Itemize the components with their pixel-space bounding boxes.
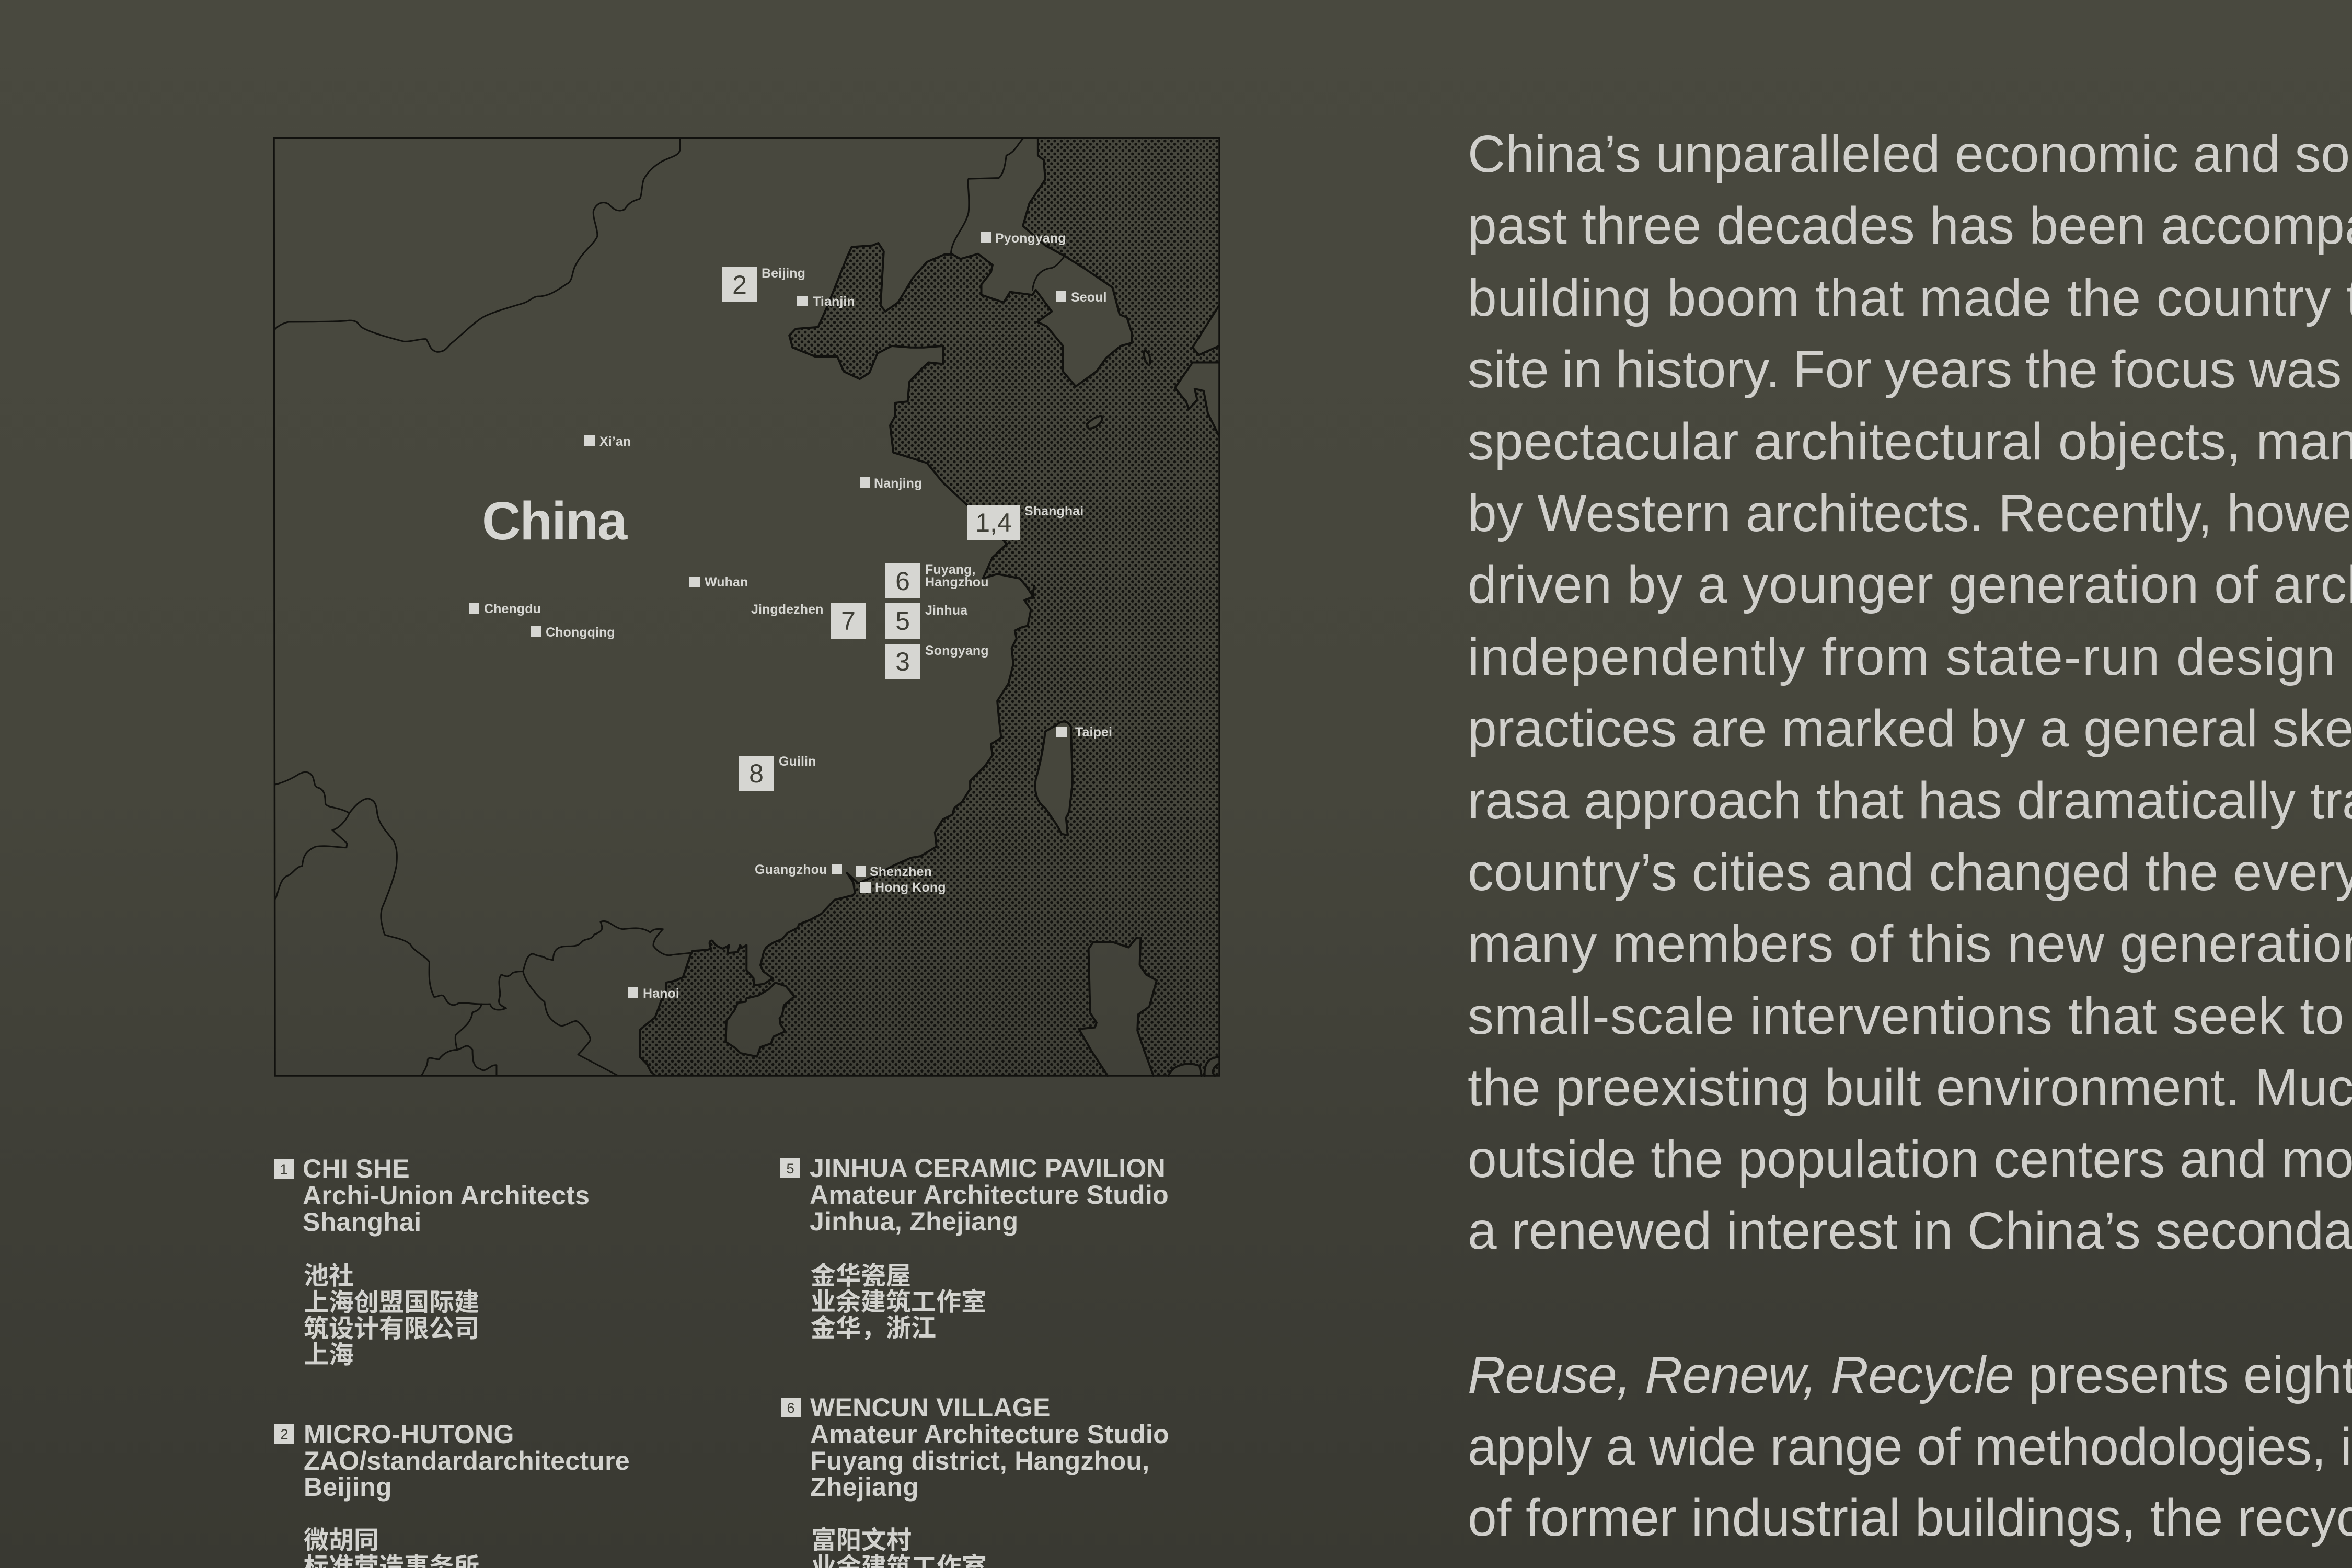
city: Nanjing: Nanjing (874, 476, 922, 491)
legend entry 2: Micro-Hutong: 2 (280, 1426, 289, 1442)
city: Pyongyang: Pyongyang (995, 231, 1066, 246)
legend entry 1: Chi She: 1 (280, 1161, 288, 1177)
marker 6: Fuyang, Hangzhou: Fuyang, (925, 562, 976, 577)
legend entry 1: Chi She: 池社 (304, 1262, 354, 1290)
marker 3: Songyang: 3 (895, 647, 910, 676)
legend entry 5: Jinhua Ceramic Pavilion: 金华瓷屋 (811, 1262, 911, 1290)
legend entry 6: Wencun Village: Amateur Architecture Studio (810, 1420, 1169, 1449)
legend entry 1: Chi She: 筑设计有限公司 (304, 1315, 479, 1343)
city: Hong Kong: Hong Kong (875, 880, 946, 895)
legend entry 6: Wencun Village: 富阳文村 (811, 1527, 912, 1554)
body text: introduction paragraph: small-scale interventions that seek to (1468, 987, 2345, 1045)
city: Wuhan: Wuhan (705, 575, 748, 590)
legend entry 5: Jinhua Ceramic Pavilion (780, 1154, 1169, 1342)
legend entry 1: Chi She (274, 1154, 590, 1369)
body text: second paragraph (1468, 1346, 2352, 1547)
legend entry 2: Micro-Hutong (274, 1420, 630, 1568)
legend entry 1: Chi She: 上海创盟国际建 (304, 1289, 479, 1317)
legend entry 5: Jinhua Ceramic Pavilion: JINHUA CERAMIC PAVILION (810, 1154, 1166, 1183)
marker 6: Fuyang, Hangzhou (885, 562, 989, 598)
legend entry 2: Micro-Hutong: MICRO-HUTONG (304, 1420, 514, 1449)
city: Chongqing: Chongqing (546, 625, 615, 640)
marker 2: Beijing: 2 (732, 270, 747, 299)
marker 8: Guilin: Guilin (779, 754, 816, 769)
marker 5: Jinhua: Jinhua (925, 603, 968, 618)
legend entry 6: Wencun Village: 6 (787, 1400, 795, 1416)
legend entry 1: Chi She: 上海 (304, 1341, 354, 1369)
marker 7: Jingdezhen: 7 (841, 606, 856, 636)
coastline: East China Sea, Taiwan, Philippines (847, 586, 1218, 1076)
coastline: Yellow Sea, Korea, Japan (789, 139, 1219, 598)
legend entry 5: Jinhua Ceramic Pavilion: Amateur Architecture Studio (810, 1180, 1169, 1209)
legend entry 5: Jinhua Ceramic Pavilion: 金华，浙江 (811, 1315, 936, 1342)
city: Taipei: Taipei (1075, 725, 1112, 740)
city: Hanoi: Hanoi (643, 986, 679, 1001)
marker 3: Songyang: Songyang (925, 643, 989, 658)
country label: China: China (482, 491, 628, 551)
legend entry 1: Chi She: Shanghai (303, 1207, 421, 1237)
legend entry 6: Wencun Village: Zhejiang (810, 1472, 919, 1502)
body text: introduction paragraph (1468, 125, 2352, 1260)
marker 1,4: Shanghai: 1,4 (975, 508, 1012, 537)
city: Chengdu: Chengdu (484, 602, 541, 616)
marker 3: Songyang (885, 643, 989, 679)
map frame (274, 138, 1219, 1076)
marker 1,4: Shanghai (967, 504, 1083, 540)
legend entry 5: Jinhua Ceramic Pavilion: Jinhua, Zhejiang (810, 1207, 1018, 1236)
body text: second paragraph: Reuse, Renew, Recycle presents eight (1468, 1346, 2352, 1404)
legend entry 6: Wencun Village: WENCUN VILLAGE (810, 1393, 1051, 1422)
legend entry 5: Jinhua Ceramic Pavilion: 业余建筑工作室 (811, 1288, 986, 1316)
land borders north (275, 139, 680, 352)
legend entry 5: Jinhua Ceramic Pavilion: 5 (786, 1161, 794, 1177)
city: Xi'an (584, 434, 631, 449)
city: Xi'an: Xi’an (599, 434, 631, 449)
legend entry 6: Wencun Village: Fuyang district, Hangzhou, (810, 1446, 1149, 1475)
map panel: China (274, 138, 1219, 1076)
marker 2: Beijing: Beijing (762, 266, 805, 281)
marker 6: Fuyang, Hangzhou: 6 (895, 567, 910, 596)
city: Taipei (1056, 725, 1112, 740)
marker 5: Jinhua: 5 (895, 606, 910, 636)
legend entry 6: Wencun Village (781, 1393, 1169, 1568)
body text: introduction paragraph: many members of this new generation (1468, 915, 2352, 973)
city: Seoul: Seoul (1071, 290, 1107, 305)
city: Tianjin: Tianjin (813, 294, 855, 309)
marker 2: Beijing (722, 266, 805, 302)
marker 7: Jingdezhen: Jingdezhen (751, 602, 824, 617)
coastline: Gulf of Tonkin and Hainan (640, 895, 852, 1075)
land borders southwest (275, 772, 691, 1076)
marker 8: Guilin (739, 754, 816, 791)
legend entry 2: Micro-Hutong: 微胡同 (304, 1527, 379, 1554)
legend entry 2: Micro-Hutong: Beijing (304, 1472, 392, 1502)
marker 8: Guilin: 8 (749, 759, 764, 788)
sea dot pattern (641, 139, 1218, 1075)
marker 6: Fuyang, Hangzhou: Hangzhou (925, 575, 989, 590)
marker 7: Jingdezhen (751, 602, 866, 639)
legend entry 2: Micro-Hutong: ZAO/standardarchitecture (304, 1446, 630, 1475)
body text: introduction paragraph: independently from state-run design (1468, 628, 2336, 686)
marker 5: Jinhua (885, 603, 968, 639)
legend entry 1: Chi She: CHI SHE (303, 1154, 410, 1183)
legend entry 1: Chi She: Archi-Union Architects (303, 1181, 590, 1210)
city: Shenzhen: Shenzhen (870, 864, 932, 879)
city: Guangzhou: Guangzhou (755, 862, 827, 877)
marker 1,4: Shanghai: Shanghai (1024, 504, 1083, 518)
